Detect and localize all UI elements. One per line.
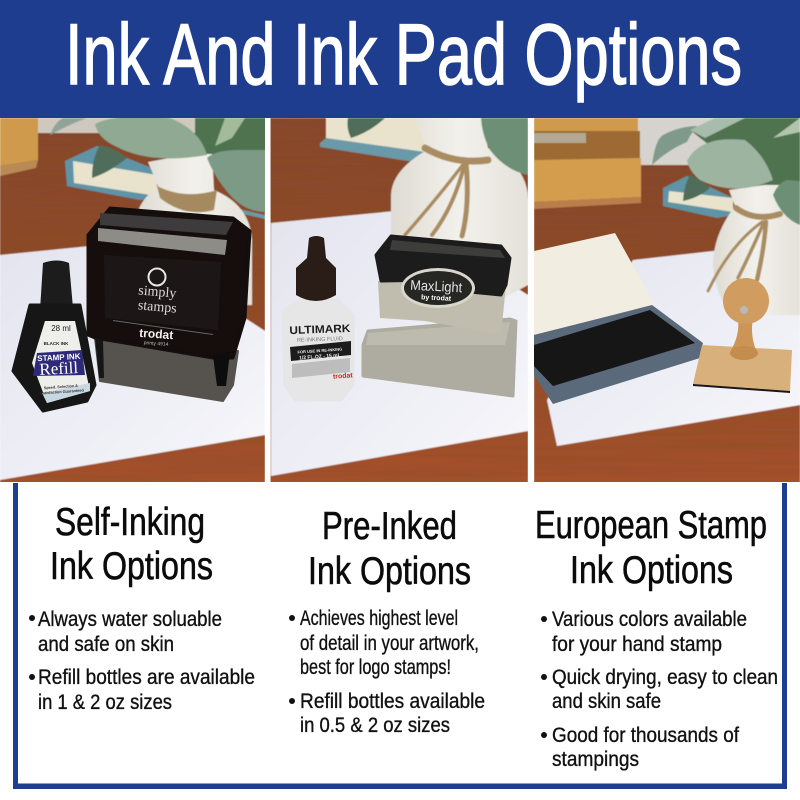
self-inking stamp	[88, 208, 250, 401]
maxlight oval badge	[401, 268, 475, 308]
bottle label text: 28 ml	[51, 324, 71, 333]
ink pad	[534, 233, 703, 404]
book	[320, 118, 425, 162]
ultimark bottle: FOR USE IN RE-INKING	[297, 346, 342, 355]
panel: ink options frame	[13, 483, 787, 789]
bullet list: Quick drying, easy to clean	[552, 666, 778, 689]
bullet list: in 0.5 & 2 oz sizes	[300, 714, 450, 737]
heading: Self-Inking	[55, 501, 205, 544]
bullet list: for your hand stamp	[552, 633, 722, 656]
panel: self-inking photo	[0, 116, 266, 483]
twine knot	[157, 186, 217, 212]
bullet list: best for logo stamps!	[300, 656, 451, 679]
panel: european stamp photo	[534, 118, 800, 483]
book	[65, 146, 157, 200]
ink refill bottle: Refill	[39, 358, 79, 379]
maxlight oval badge: MaxLight	[410, 277, 463, 295]
ultimark bottle	[283, 236, 354, 400]
metal pin	[740, 306, 748, 314]
wooden hand stamp	[693, 278, 792, 393]
logo mark	[148, 268, 166, 286]
bullet list	[289, 607, 485, 737]
heading: Ink Options	[308, 550, 471, 593]
heading: Ink Options	[50, 545, 213, 588]
heading	[308, 505, 471, 593]
panel: pre-inked photo	[270, 118, 528, 483]
bullet list	[29, 608, 255, 714]
paper sheet	[0, 246, 265, 480]
header banner	[0, 0, 800, 118]
twine	[405, 148, 488, 236]
heading	[535, 504, 767, 592]
bottle label text: ULTIMARK	[289, 323, 351, 337]
vase	[713, 180, 800, 316]
bullet list: of detail in your artwork,	[300, 632, 479, 655]
heading: Ink Options	[570, 549, 733, 592]
ink refill bottle: Satisfaction Guaranteed	[40, 388, 85, 396]
column: european stamp	[535, 504, 778, 771]
ink refill bottle: BLACK INK	[44, 341, 69, 346]
bullet list: in 1 & 2 oz sizes	[38, 691, 172, 714]
heading	[50, 501, 213, 588]
vase	[137, 150, 252, 305]
paper sheet	[547, 251, 800, 446]
bullet list: and skin safe	[552, 690, 661, 713]
self-inking stamp: stamps	[137, 298, 177, 317]
maxlight oval badge: by trodat	[421, 294, 452, 303]
ink refill bottle: Speed, Selection &	[44, 384, 78, 390]
ultimark bottle: trodat	[333, 372, 354, 381]
bullet list: Always water soluable	[38, 608, 222, 631]
bullet list: stampings	[552, 748, 639, 771]
self-inking stamp: printy 4914	[144, 340, 169, 348]
column: self-inking	[29, 501, 255, 714]
trodat mark: trodat	[139, 326, 174, 342]
heading: Pre-Inked	[322, 505, 457, 548]
twine	[708, 208, 780, 291]
bullet list: Refill bottles are available	[38, 666, 255, 689]
leaves	[50, 116, 266, 212]
bullet list: and safe on skin	[38, 633, 174, 656]
leaves	[652, 118, 800, 225]
pre-inked stamp	[363, 236, 516, 396]
ultimark bottle: 1/2 FL.OZ - 15 mL	[299, 353, 341, 361]
ink refill bottle: STAMP INK	[37, 352, 81, 363]
ink refill bottle	[13, 260, 95, 411]
book	[663, 176, 733, 218]
bullet list	[541, 608, 778, 771]
ultimark bottle: RE-INKING FLUID	[297, 336, 343, 344]
bullet list: Refill bottles available	[300, 690, 485, 713]
bullet list: Achieves highest level	[300, 607, 458, 630]
paper sheet	[271, 211, 528, 476]
wooden crate	[534, 118, 641, 209]
bullet list: Good for thousands of	[552, 724, 739, 747]
column: pre-inked	[289, 505, 485, 737]
stamp brand text: simply	[138, 283, 177, 302]
leaves	[347, 118, 528, 175]
vase	[391, 118, 528, 300]
bullet list: Various colors available	[552, 608, 747, 631]
